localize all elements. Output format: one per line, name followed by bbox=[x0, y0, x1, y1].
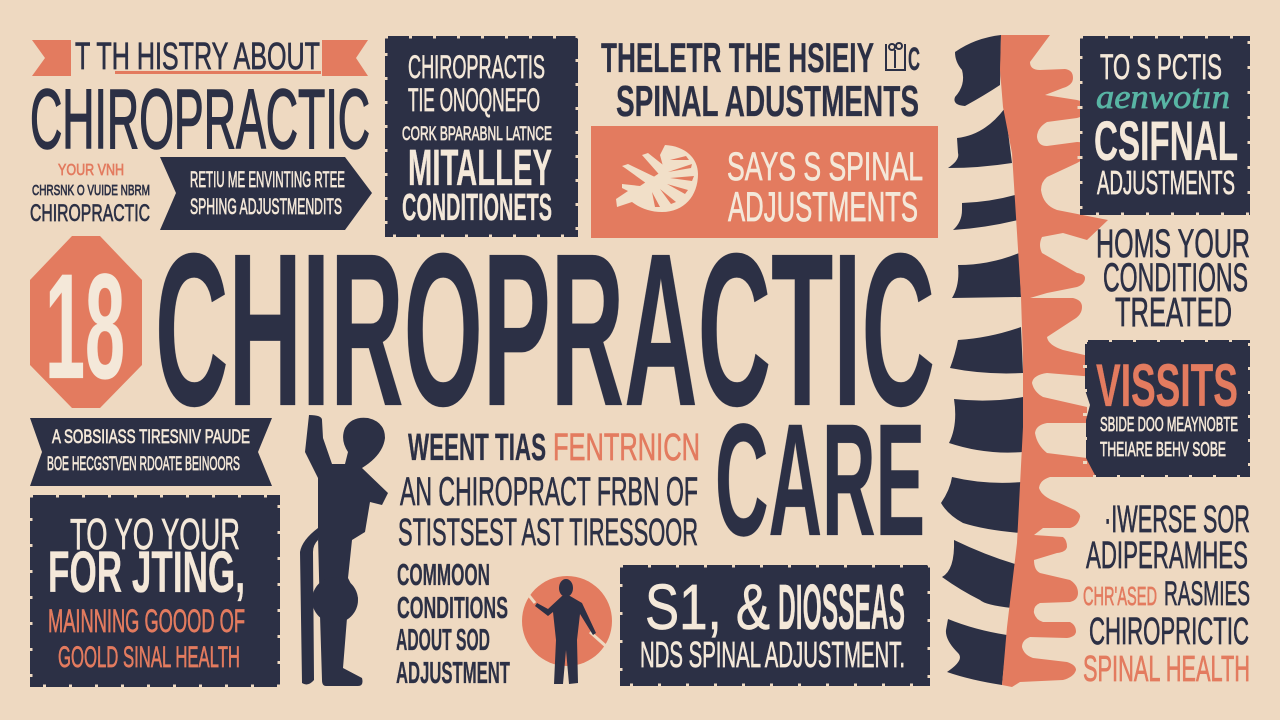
panel: conditions box: MITALLEY bbox=[408, 139, 552, 196]
panel: conditions box: TIE ONOQNEFO bbox=[408, 82, 540, 118]
ribbon: right bbox=[322, 40, 368, 76]
heading: spinal adjustments: SPINAL ADUSTMENTS bbox=[616, 77, 919, 126]
text block: conditions treated bbox=[1096, 222, 1250, 335]
text block: common conditions bbox=[396, 557, 510, 690]
text block: middle paragraph: WEENT TIAS bbox=[408, 427, 546, 469]
panel: top-right adjustments: aenwotın bbox=[1096, 79, 1230, 116]
icon: hand and leaf bbox=[616, 145, 698, 212]
panel: good spinal health: GOOLD SINAL HEALTH bbox=[58, 641, 240, 674]
text block: common conditions: COMMOON bbox=[397, 557, 490, 592]
illustration: spine bbox=[941, 35, 1108, 687]
panel: coral spinal adjustments bbox=[591, 126, 938, 238]
text block: middle paragraph: AN CHIROPRACT FRBN OF bbox=[400, 470, 698, 514]
underline bbox=[115, 71, 321, 74]
heading: spinal adjustments: THELETR THE HSIEIY bbox=[601, 34, 874, 81]
text block: middle paragraph bbox=[398, 427, 700, 554]
panel: top-right adjustments bbox=[1080, 36, 1250, 215]
text block: common conditions: ADOUT SOD bbox=[396, 622, 490, 657]
small chiropractic label: CHIROPRACTIC bbox=[30, 200, 150, 227]
banner: top-left navy bbox=[160, 157, 372, 230]
ribs bbox=[941, 35, 1023, 685]
banner: top-left navy: RETIU ME ENVINTING RTEE bbox=[190, 167, 345, 192]
banner: lower-left navy: A SOBSIIASS TIRESNIV PAUDE bbox=[52, 427, 250, 448]
badge: 18 octagon: 18 bbox=[45, 242, 125, 410]
text block: bottom-right spinal health bbox=[1083, 499, 1250, 689]
panel: visits bbox=[1085, 340, 1250, 477]
heading: spinal adjustments: C bbox=[908, 41, 920, 77]
heading: history about: T TH HISTRY ABOUT bbox=[75, 36, 320, 78]
panel: conditions box: CORK BPARABNL LATNCE bbox=[402, 124, 552, 145]
panel: conditions box: CONDITIONETS bbox=[402, 187, 552, 229]
text block: common conditions: CONDITIONS bbox=[397, 590, 508, 625]
panel: good spinal health bbox=[30, 495, 280, 687]
heading: spinal adjustments bbox=[601, 34, 920, 126]
panel: diosseas bbox=[620, 565, 930, 686]
panel: coral spinal adjustments: SAYS S SPINAL bbox=[727, 145, 923, 189]
panel: top-left title block bbox=[30, 36, 370, 227]
icon: small tree book bbox=[886, 43, 905, 70]
banner: lower-left navy: BOE HECGSTVEN RDOATE BEINOORS bbox=[47, 454, 240, 475]
text: DIOSSEAS bbox=[778, 571, 905, 643]
text block: middle paragraph: STISTSEST AST TIRESSOOR bbox=[398, 512, 698, 554]
text block: middle paragraph: FENTRNICN bbox=[553, 427, 700, 469]
panel: good spinal health: TO YO YOUR bbox=[70, 510, 240, 559]
panel: good spinal health: MAINNING GOOOD OF bbox=[48, 603, 245, 639]
figure: person silhouette with stick bbox=[300, 415, 388, 686]
panel: coral spinal adjustments: ADJUSTMENTS bbox=[728, 183, 918, 230]
panel: conditions box: CHIROPRACTIS bbox=[408, 49, 545, 85]
ribbon: left bbox=[32, 40, 71, 76]
panel: good spinal health: FOR JTING, bbox=[48, 540, 245, 605]
text block: common conditions: ADJUSTMENT bbox=[396, 655, 510, 690]
panel: diosseas: S1, & bbox=[645, 571, 770, 643]
heading: chiropractic: CHIROPRACTIC bbox=[30, 72, 370, 166]
badge: 18 octagon bbox=[30, 236, 142, 410]
icon: child in coral circle bbox=[522, 576, 612, 684]
banner: top-left navy: SPHING ADJUSTMENDITS bbox=[190, 194, 342, 219]
small text line: CHRSNK O VUIDE NBRM bbox=[32, 182, 150, 199]
vertebral column bbox=[1000, 35, 1108, 687]
small coral label: YOUR VNH bbox=[58, 162, 124, 179]
text block: bottom-right spinal health: CHR'ASED bbox=[1083, 581, 1157, 611]
text: CARE bbox=[715, 390, 925, 569]
panel: conditions box bbox=[385, 36, 578, 237]
panel: diosseas: NDS SPINAL ADJUSTMENT. bbox=[640, 634, 905, 675]
banner: lower-left navy bbox=[30, 418, 272, 486]
